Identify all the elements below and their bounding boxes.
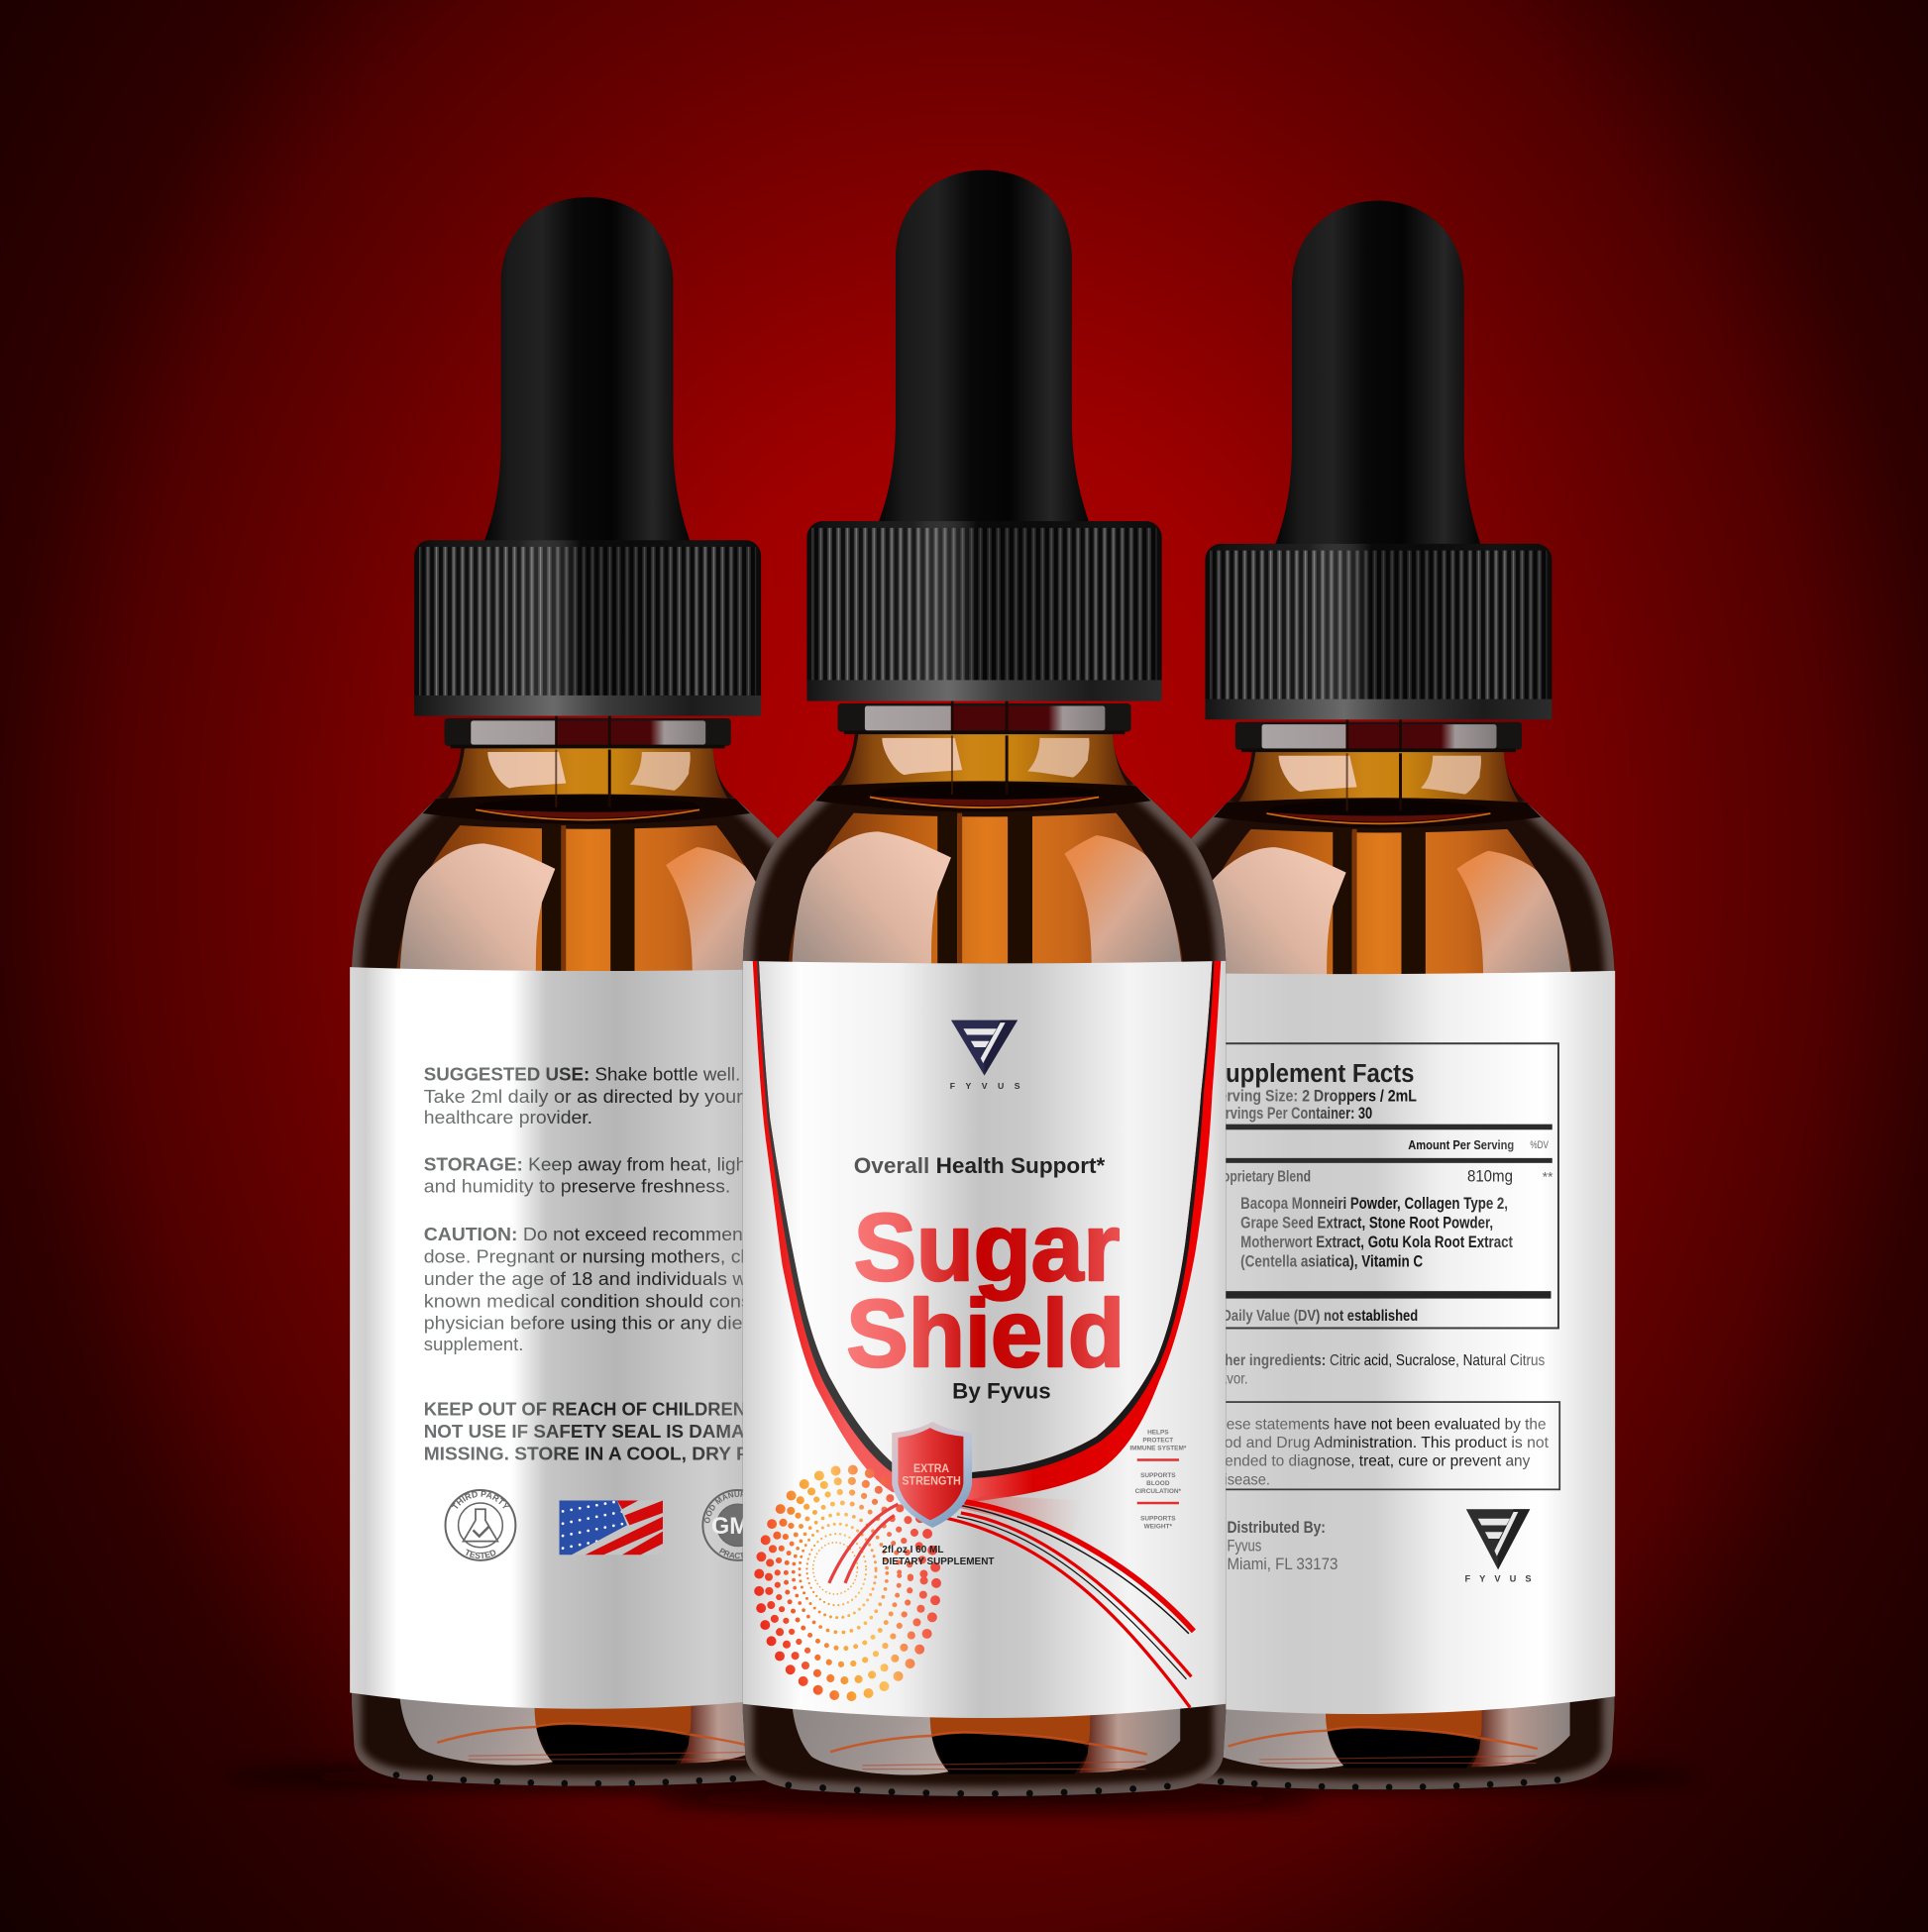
icon: GMP seal: GOOD MANUFACTURING [704, 1491, 743, 1524]
left label directions text: Take 2ml daily or as directed by your [424, 1086, 743, 1107]
tagline: Overall Health Support* [854, 1153, 1106, 1178]
supplement facts panel: Motherwort Extract, Gotu Kola Root Extract [1240, 1234, 1513, 1251]
supplement facts panel: Proprietary Blend [1210, 1168, 1311, 1185]
FDA disclaimer box: intended to diagnose, treat, cure or prevent any [1209, 1453, 1531, 1470]
distributor text: Miami, FL 33173 [1227, 1555, 1338, 1573]
left label directions text: KEEP OUT OF REACH OF CHILDREN. DO [424, 1399, 784, 1420]
center bottle glass, cap and dropper [743, 170, 1226, 1796]
FDA disclaimer box: These statements have not been evaluated by the [1209, 1416, 1547, 1433]
benefit list [1129, 1429, 1187, 1531]
other ingredients text: Other ingredients: Citric acid, Sucralose, Natural Citrus [1210, 1352, 1545, 1369]
logo: Fyvus on right label: FYVUS [1464, 1574, 1532, 1584]
icon: american flag [555, 1501, 663, 1555]
red shield-shaped curve [753, 961, 1221, 1502]
ground shadow under bottles [222, 1763, 1700, 1811]
left label directions text: SUGGESTED USE: Shake bottle well. [424, 1064, 740, 1085]
supplement facts panel [1201, 1043, 1558, 1328]
benefit list: BLOOD [1146, 1480, 1170, 1487]
supplement facts panel: (Centella asiatica), Vitamin C [1240, 1252, 1423, 1270]
bottle: center (front label) [743, 170, 1226, 1796]
benefit list: IMMUNE SYSTEM* [1129, 1446, 1187, 1452]
supplement facts panel: Bacopa Monneiri Powder, Collagen Type 2, [1240, 1195, 1508, 1213]
shield badge: extra strength: EXTRA [913, 1461, 950, 1475]
benefit list: HELPS [1147, 1429, 1169, 1436]
benefit list: SUPPORTS [1140, 1515, 1176, 1522]
supplement facts panel: ** Daily Value (DV) not established [1209, 1308, 1418, 1325]
product name title: Sugar [854, 1193, 1120, 1301]
icon: GMP seal: PRACTICE [719, 1548, 743, 1558]
left label directions text: supplement. [424, 1334, 523, 1354]
left label directions text: MISSING. STORE IN A COOL, DRY PLACE. [424, 1444, 805, 1464]
left bottle glass, cap and dropper [352, 197, 823, 1786]
icon: GMP seal [701, 1489, 765, 1561]
other ingredients text [1209, 1352, 1545, 1387]
shield badge: extra strength: STRENGTH [902, 1473, 961, 1487]
left label directions text: known medical condition should consult a [424, 1290, 789, 1311]
product name title: Shield [846, 1279, 1125, 1387]
supplement facts panel: Supplement Facts [1210, 1058, 1414, 1088]
supplement facts panel: 810mg [1467, 1167, 1513, 1185]
left label directions text: under the age of 18 and individuals with a [424, 1268, 784, 1289]
left label directions text [424, 1064, 818, 1464]
swoosh lines [829, 1496, 1194, 1707]
logo: Fyvus on right label [1464, 1509, 1532, 1584]
bottle: right (supplement facts label) [1142, 201, 1615, 1789]
icon: GMP seal: GMP [711, 1514, 765, 1540]
dotted spiral graphic [759, 1469, 936, 1696]
benefit list: PROTECT [1142, 1437, 1173, 1444]
FDA disclaimer box: Food and Drug Administration. This product is not [1206, 1435, 1550, 1451]
right bottle glass, cap and dropper [1142, 201, 1615, 1789]
icon: third party tested seal: TESTED [466, 1550, 495, 1558]
supplement facts panel: %DV [1530, 1139, 1549, 1151]
volume and dietary supplement text: 2fl oz I 60 ML [882, 1544, 944, 1556]
icon: third party tested seal [444, 1489, 517, 1561]
other ingredients text: Flavor. [1209, 1370, 1248, 1387]
bottle: left (directions label) [350, 197, 818, 1787]
icon: third party tested seal: THIRD PARTY [452, 1491, 509, 1509]
logo: Fyvus on center label [950, 1020, 1020, 1091]
FDA disclaimer box: disease. [1216, 1471, 1270, 1488]
supplement facts panel: Serving Size: 2 Droppers / 2mL [1210, 1088, 1417, 1106]
logo: Fyvus on center label: FYVUS [950, 1081, 1020, 1091]
benefit list: CIRCULATION* [1135, 1488, 1182, 1495]
left label directions text: CAUTION: Do not exceed recommended [424, 1224, 775, 1244]
right bottle label panel [1201, 971, 1615, 1714]
center label panel [743, 961, 1226, 1718]
left label directions text: healthcare provider. [424, 1107, 592, 1127]
by Fyvus: By Fyvus [952, 1378, 1051, 1403]
volume and dietary supplement text [882, 1544, 995, 1567]
distributor text: Fyvus [1227, 1537, 1261, 1556]
supplement facts panel: Grape Seed Extract, Stone Root Powder, [1240, 1215, 1493, 1233]
supplement facts panel: ** [1543, 1169, 1553, 1184]
supplement facts panel: Amount Per Serving [1408, 1138, 1514, 1152]
product name title [846, 1193, 1125, 1387]
supplement facts panel: Servings Per Container: 30 [1210, 1105, 1372, 1123]
FDA disclaimer box [1201, 1402, 1559, 1489]
left label directions text: STORAGE: Keep away from heat, light [424, 1153, 752, 1174]
left label directions text: dose. Pregnant or nursing mothers, children [424, 1246, 799, 1267]
distributor text: Distributed By: [1227, 1518, 1326, 1537]
distributor text [1227, 1518, 1338, 1573]
left label directions text: and humidity to preserve freshness. [424, 1176, 730, 1197]
volume and dietary supplement text: DIETARY SUPPLEMENT [882, 1556, 995, 1567]
left label directions text: physician before using this or any dietary [424, 1313, 776, 1334]
benefit list: SUPPORTS [1140, 1472, 1176, 1479]
left label directions text: NOT USE IF SAFETY SEAL IS DAMAGED OR [424, 1421, 818, 1442]
left bottle label panel [350, 967, 752, 1709]
shield badge: extra strength [892, 1422, 972, 1528]
benefit list: WEIGHT* [1144, 1524, 1172, 1531]
